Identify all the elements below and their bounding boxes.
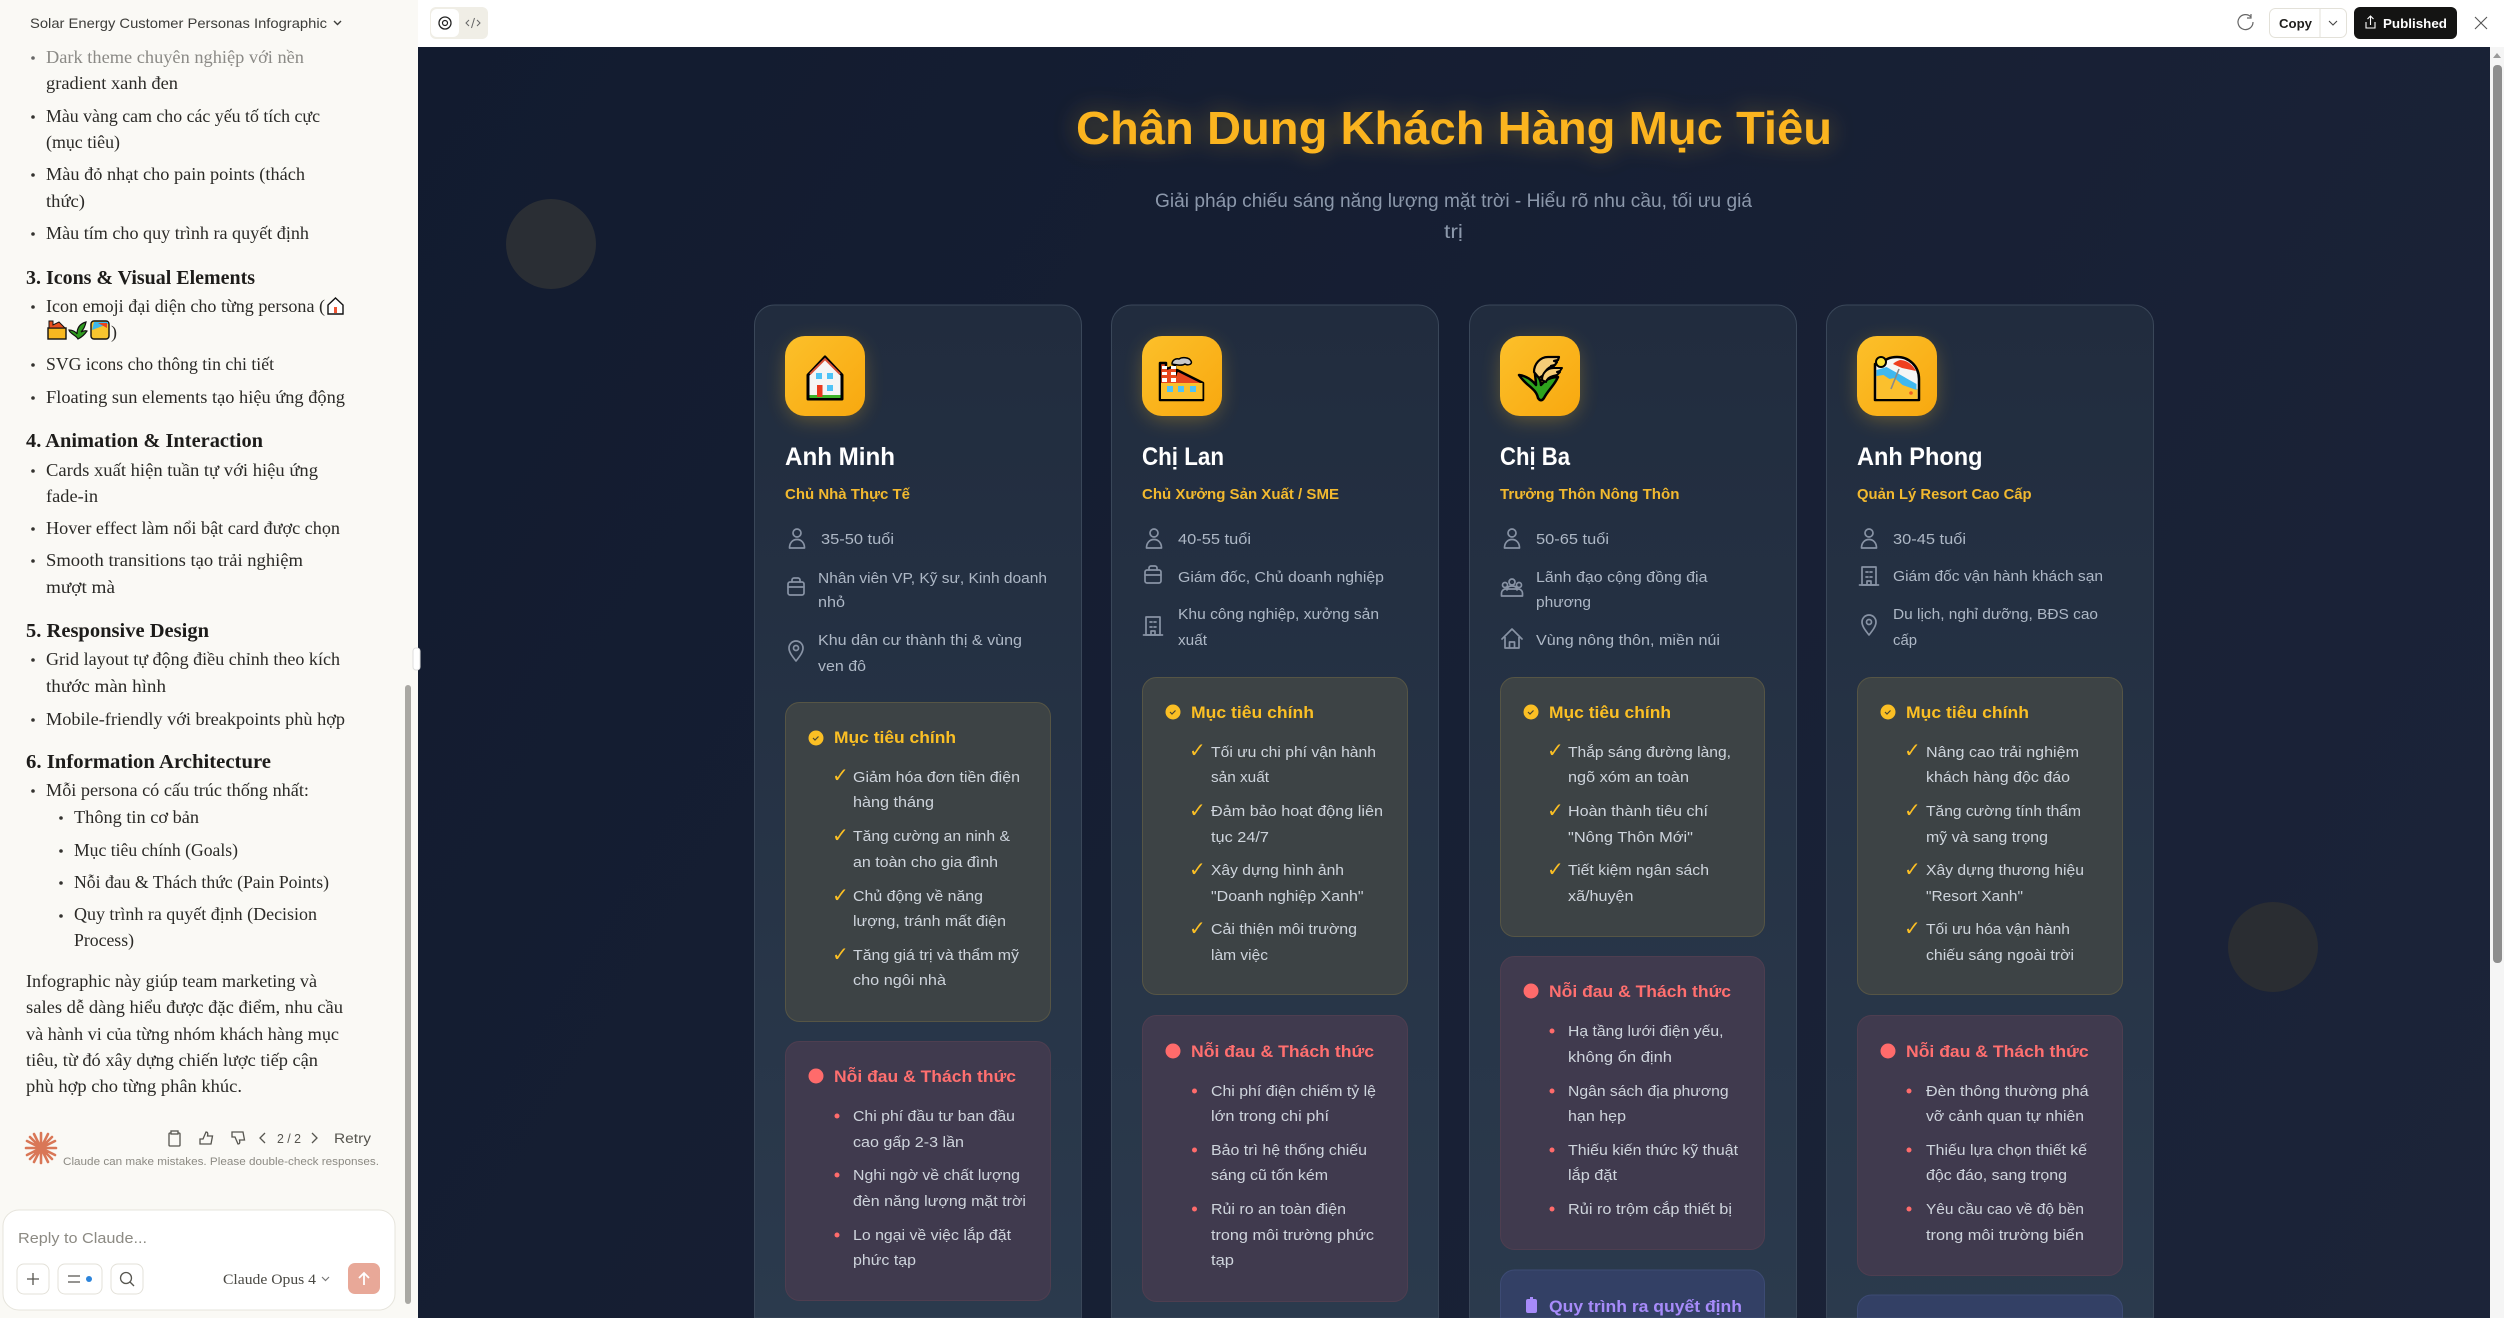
basic info — [1502, 529, 1720, 649]
floating sun right — [2228, 902, 2318, 992]
text block: architecture section list: Process) — [74, 930, 134, 951]
pain points box: đèn năng lượng mặt trời — [853, 1193, 1026, 1210]
goals box: an toàn cho gia đình — [853, 854, 998, 871]
basic info — [788, 529, 1047, 675]
goals box: ✓ — [832, 763, 849, 787]
basic info: nhỏ — [818, 594, 845, 611]
basic info: 30-45 tuổi — [1893, 531, 1966, 548]
text block: animation section list: Hover effect làm nổi bật card được chọn — [46, 518, 340, 538]
text block: animation section list — [31, 460, 340, 597]
goals box — [1500, 678, 1764, 936]
sidebar resize handle — [413, 648, 420, 670]
goals box: Tăng giá trị và thẩm mỹ — [853, 947, 1020, 964]
pain points box — [1858, 1016, 2122, 1276]
goals box: hàng tháng — [853, 794, 934, 811]
basic info: Nhân viên VP, Kỹ sư, Kinh doanh — [818, 570, 1047, 587]
pain points box: Ngân sách địa phương — [1568, 1083, 1729, 1100]
text block: animation section list: fade-in — [46, 486, 98, 506]
goals box: Tăng cường an ninh & — [853, 828, 1010, 845]
text block: closing paragraph: sales dễ dàng hiểu được đặc điểm, nhu cầu — [26, 997, 343, 1017]
icon: refresh — [2238, 14, 2253, 30]
text block: architecture section list: Mỗi persona có cấu trúc thống nhất: — [46, 780, 309, 800]
icon: close — [2475, 17, 2487, 29]
goals box: làm việc — [1211, 947, 1269, 964]
heading: responsive design: 5. Responsive Design — [26, 620, 209, 642]
pain points box: Lo ngại về việc lắp đặt — [853, 1227, 1012, 1244]
goals box: Tiết kiệm ngân sách — [1568, 862, 1709, 879]
reply input box — [3, 1210, 395, 1310]
pain points box: vỡ cảnh quan tự nhiên — [1926, 1108, 2084, 1125]
conversation title: Solar Energy Customer Personas Infographic — [30, 15, 327, 31]
heading: information architecture: 6. Information Architecture — [26, 751, 271, 773]
pain points box: Chi phí điện chiếm tỷ lệ — [1211, 1083, 1376, 1100]
panel: persona Anh Phong — [1826, 305, 2154, 1318]
text block: responsive section list: Mobile-friendly với breakpoints phù hợp — [46, 709, 345, 729]
goals box: ✓ — [1189, 738, 1206, 762]
goals box: Nâng cao trải nghiệm — [1926, 744, 2079, 761]
goals box: ngõ xóm an toàn — [1568, 769, 1689, 786]
basic info: 50-65 tuổi — [1536, 531, 1609, 548]
text block: architecture section list: Mục tiêu chính (Goals) — [74, 840, 238, 861]
floating sun left — [506, 199, 596, 289]
message action bar: 2 / 2 — [277, 1131, 301, 1146]
window scrollbar — [2490, 47, 2504, 1318]
text block: color section list — [31, 47, 320, 243]
goals box: Mục tiêu chính — [834, 728, 956, 747]
text block: responsive section list: Grid layout tự động điều chỉnh theo kích — [46, 649, 340, 669]
name: Chị Lan — [1142, 443, 1224, 471]
text block: architecture section list: Thông tin cơ bản — [74, 807, 199, 827]
pain points box: hạn hẹp — [1568, 1108, 1626, 1125]
basic info: Giám đốc vận hành khách sạn — [1893, 568, 2103, 585]
basic info: ven đô — [818, 658, 866, 675]
basic info — [1860, 529, 2103, 649]
goals box: sản xuất — [1211, 769, 1270, 786]
goals box: ✓ — [1189, 916, 1206, 940]
goals box: Tăng cường tính thẩm — [1926, 803, 2081, 820]
basic info: Giám đốc, Chủ doanh nghiệp — [1178, 569, 1384, 586]
name: Chị Ba — [1500, 443, 1571, 471]
goals box: ✓ — [832, 823, 849, 847]
pain points box: Rủi ro an toàn điện — [1211, 1201, 1346, 1218]
text block: color section list: Màu tím cho quy trình ra quyết định — [46, 223, 309, 243]
goals box: tục 24/7 — [1211, 829, 1269, 846]
text block: closing paragraph: Infographic này giúp team marketing và — [26, 971, 317, 991]
basic info: Khu công nghiệp, xưởng sản — [1178, 606, 1379, 623]
goals box: ✓ — [1904, 798, 1921, 822]
pain points box: Nỗi đau & Thách thức — [1906, 1042, 2089, 1061]
goals box: Mục tiêu chính — [1906, 703, 2029, 722]
panel: persona Anh Minh — [754, 305, 1082, 1318]
goals box: ✓ — [1904, 857, 1921, 881]
text block: responsive section list: thước màn hình — [46, 676, 166, 696]
goals box: Giảm hóa đơn tiền điện — [853, 769, 1020, 786]
text block: color section list: Màu đỏ nhạt cho pain points (thách — [46, 164, 305, 185]
role: Chủ Nhà Thực Tế — [785, 486, 911, 503]
pain points box: cao gấp 2-3 lần — [853, 1134, 964, 1151]
goals box: lượng, tránh mất điện — [853, 913, 1006, 930]
icon: house — [785, 336, 865, 419]
goals box: "Doanh nghiệp Xanh" — [1211, 888, 1364, 905]
text block: color section list: Màu vàng cam cho các yếu tố tích cực — [46, 106, 320, 126]
pain points box: lắp đặt — [1568, 1167, 1618, 1184]
basic info: xuất — [1178, 632, 1208, 649]
text block: icons section list: SVG icons cho thông tin chi tiết — [46, 354, 274, 374]
pain points box: Thiếu kiến thức kỹ thuật — [1568, 1142, 1739, 1159]
goals box: Tối ưu chi phí vận hành — [1211, 744, 1376, 761]
subtitle — [1155, 191, 1752, 243]
role: Quản Lý Resort Cao Cấp — [1857, 486, 2032, 503]
role: Chủ Xưởng Sản Xuất / SME — [1142, 486, 1339, 503]
goals box: Cải thiện môi trường — [1211, 921, 1357, 938]
text block: architecture section list: Quy trình ra quyết định (Decision — [74, 904, 317, 925]
panel: chat sidebar — [0, 0, 418, 1318]
published button — [2354, 7, 2457, 39]
pain points box: lớn trong chi phí — [1211, 1108, 1330, 1125]
pain points box: tạp — [1211, 1252, 1234, 1269]
top toolbar — [418, 0, 2504, 47]
pain points box: Rủi ro trộm cắp thiết bị — [1568, 1201, 1732, 1218]
text block: responsive section list — [31, 649, 345, 729]
text block: closing paragraph: tiêu, từ đó xây dựng chiến lược tiếp cận — [26, 1050, 318, 1070]
icon: beach — [1857, 336, 1937, 419]
pain points box: trong môi trường phức — [1211, 1227, 1375, 1244]
goals box: Hoàn thành tiêu chí — [1568, 803, 1709, 820]
message action bar — [169, 1131, 371, 1146]
message action bar: Retry — [334, 1131, 371, 1146]
goals box — [786, 702, 1050, 1022]
heading: icons and visual elements: 3. Icons & Visual Elements — [26, 267, 255, 289]
text block: closing paragraph — [26, 971, 343, 1096]
subtitle: Giải pháp chiếu sáng năng lượng mặt trời - Hiểu rõ nhu cầu, tối ưu giá — [1155, 191, 1752, 212]
published button: Published — [2383, 16, 2447, 31]
text block: architecture section list: Nỗi đau & Thách thức (Pain Points) — [74, 872, 329, 893]
text block: icons section list: ) — [111, 322, 117, 343]
basic info: phương — [1536, 594, 1591, 611]
decision process box — [1858, 1295, 2122, 1318]
panel: persona Chị Ba — [1470, 305, 1796, 1318]
copy button: Copy — [2279, 16, 2313, 31]
basic info: Vùng nông thôn, miền núi — [1536, 632, 1720, 649]
icon: claude logo — [26, 1133, 56, 1163]
icon: rice plant — [1500, 336, 1580, 419]
pain points box: Thiếu lựa chọn thiết kế — [1926, 1142, 2088, 1159]
goals box — [1858, 678, 2122, 994]
goals box: Xây dựng hình ảnh — [1211, 862, 1344, 879]
pain points box: không ổn định — [1568, 1049, 1672, 1066]
pain points box: Bảo trì hệ thống chiếu — [1211, 1142, 1367, 1159]
text block: animation section list: Smooth transitions tạo trải nghiệm — [46, 550, 303, 570]
goals box: xã/huyện — [1568, 888, 1634, 905]
pain points box: Đèn thông thường phá — [1926, 1083, 2089, 1100]
panel: dark artifact background — [418, 47, 2490, 1318]
goals box: ✓ — [1547, 798, 1564, 822]
goals box: ✓ — [1904, 738, 1921, 762]
role: Trưởng Thôn Nông Thôn — [1500, 486, 1680, 503]
text block: closing paragraph: và hành vi của từng nhóm khách hàng mục — [26, 1024, 339, 1044]
goals box — [1142, 678, 1408, 994]
text block: animation section list: Cards xuất hiện tuần tự với hiệu ứng — [46, 460, 318, 480]
goals box: Chủ động về năng — [853, 888, 983, 905]
pain points box: Nghi ngờ về chất lượng — [853, 1167, 1020, 1184]
basic info: 40-55 tuổi — [1178, 531, 1251, 548]
goals box: mỹ và sang trọng — [1926, 829, 2048, 846]
basic info: Lãnh đạo cộng đồng địa — [1536, 569, 1708, 586]
basic info: Du lịch, nghỉ dưỡng, BĐS cao — [1893, 606, 2098, 623]
goals box: ✓ — [832, 883, 849, 907]
sidebar scrollbar — [405, 685, 411, 1304]
text block: animation section list: mượt mà — [46, 577, 115, 597]
goals box: Đảm bảo hoạt động liên — [1211, 803, 1383, 820]
text block: closing paragraph: phù hợp cho từng phân khúc. — [26, 1076, 242, 1096]
basic info — [1144, 529, 1384, 649]
goals box: khách hàng độc đáo — [1926, 769, 2070, 786]
text block: icons section list: Floating sun elements tạo hiệu ứng động — [46, 387, 345, 407]
copy button — [2270, 8, 2346, 38]
preview code toggle — [430, 7, 488, 39]
pain points box: trong môi trường biển — [1926, 1227, 2084, 1244]
goals box: chiếu sáng ngoài trời — [1926, 947, 2074, 964]
text block: architecture section list — [31, 780, 329, 951]
goals box: "Nông Thôn Mới" — [1568, 829, 1693, 846]
goals box: ✓ — [1547, 738, 1564, 762]
panel: persona Chị Lan — [1112, 305, 1438, 1318]
pain points box — [1500, 956, 1764, 1250]
text block: color section list: thức) — [46, 191, 85, 212]
text block: color section list: (mục tiêu) — [46, 132, 120, 153]
heading: animation and interaction: 4. Animation & Interaction — [26, 430, 263, 452]
basic info: 35-50 tuổi — [821, 531, 894, 548]
text block: icons section list — [31, 296, 345, 407]
goals box: ✓ — [1904, 916, 1921, 940]
pain points box: Hạ tầng lưới điện yếu, — [1568, 1023, 1724, 1040]
subtitle: trị — [1444, 222, 1463, 243]
goals box: cho ngôi nhà — [853, 972, 947, 989]
goals box: Xây dựng thương hiệu — [1926, 862, 2084, 879]
reply input box: Claude Opus 4 — [223, 1272, 317, 1288]
goals box: Thắp sáng đường làng, — [1568, 744, 1731, 761]
name: Anh Phong — [1857, 443, 1982, 471]
reply input box: Reply to Claude... — [18, 1230, 147, 1247]
pain points box: Nỗi đau & Thách thức — [834, 1067, 1016, 1086]
goals box: "Resort Xanh" — [1926, 888, 2023, 905]
pain points box: phức tạp — [853, 1252, 916, 1269]
text block: icons section list: Icon emoji đại diện cho từng persona ( — [46, 296, 325, 317]
goals box: ✓ — [832, 942, 849, 966]
goals box: ✓ — [1189, 857, 1206, 881]
icon: factory — [1142, 336, 1222, 419]
pain points box: sáng cũ tốn kém — [1211, 1167, 1328, 1184]
pain points box — [1142, 1016, 1408, 1302]
pain points box: độc đáo, sang trọng — [1926, 1167, 2067, 1184]
title: Chân Dung Khách Hàng Mục Tiêu — [1076, 102, 1832, 154]
goals box: Tối ưu hóa vận hành — [1926, 921, 2070, 938]
name: Anh Minh — [785, 443, 895, 471]
pain points box: Yêu cầu cao về độ bền — [1926, 1201, 2084, 1218]
basic info: Khu dân cư thành thị & vùng — [818, 632, 1022, 649]
decision process box: Quy trình ra quyết định — [1549, 1297, 1742, 1316]
goals box: ✓ — [1547, 857, 1564, 881]
goals box: ✓ — [1189, 798, 1206, 822]
text block: color section list: Dark theme chuyên nghiệp với nền — [46, 47, 304, 67]
pain points box: Nỗi đau & Thách thức — [1191, 1042, 1374, 1061]
goals box: Mục tiêu chính — [1549, 703, 1671, 722]
pain points box — [786, 1042, 1050, 1300]
pain points box: Chi phí đầu tư ban đầu — [853, 1108, 1015, 1125]
goals box: Mục tiêu chính — [1191, 703, 1314, 722]
text block: color section list: gradient xanh đen — [46, 73, 178, 93]
disclaimer: Claude can make mistakes. Please double-check responses. — [63, 1156, 379, 1168]
basic info: cấp — [1893, 632, 1917, 649]
decision process box — [1500, 1270, 1764, 1318]
pain points box: Nỗi đau & Thách thức — [1549, 982, 1731, 1001]
